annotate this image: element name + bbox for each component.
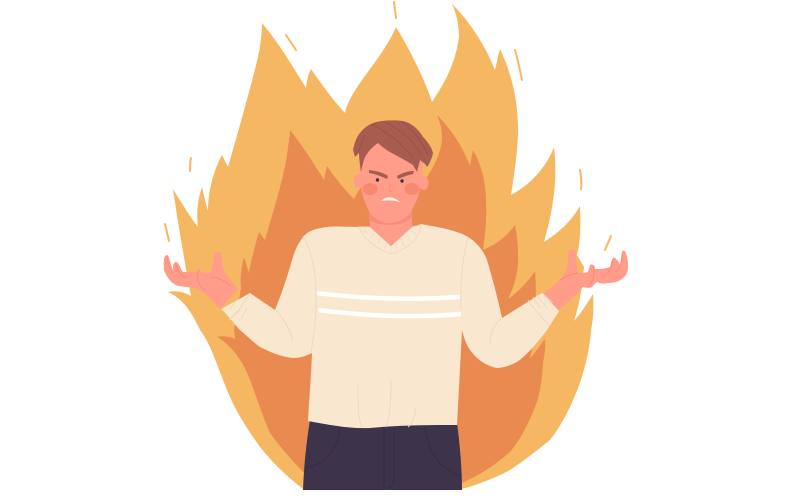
sweater — [221, 224, 559, 428]
face — [359, 130, 423, 223]
ear left — [354, 174, 362, 188]
ear right — [420, 176, 428, 190]
mouth — [381, 197, 400, 202]
neck shadow — [369, 211, 412, 225]
trousers — [303, 420, 462, 490]
hair strands — [358, 122, 428, 158]
eye left — [376, 178, 379, 182]
left hand — [164, 252, 238, 309]
hand lines — [560, 254, 622, 286]
head — [353, 120, 433, 223]
eye right — [400, 179, 404, 183]
sweater stripes — [316, 293, 461, 316]
right hand — [542, 249, 628, 310]
hair — [353, 120, 433, 172]
nose — [389, 184, 393, 192]
neck — [369, 205, 412, 246]
cheek left — [362, 183, 378, 195]
hand lines — [167, 256, 231, 290]
outer flame — [168, 4, 593, 489]
cheek right — [404, 183, 420, 195]
brow right — [397, 171, 414, 179]
spark lines — [165, 2, 611, 250]
inner flame — [217, 115, 545, 483]
sweater creases and cuffs — [229, 236, 553, 427]
collar — [359, 205, 421, 254]
brow left — [369, 170, 388, 179]
